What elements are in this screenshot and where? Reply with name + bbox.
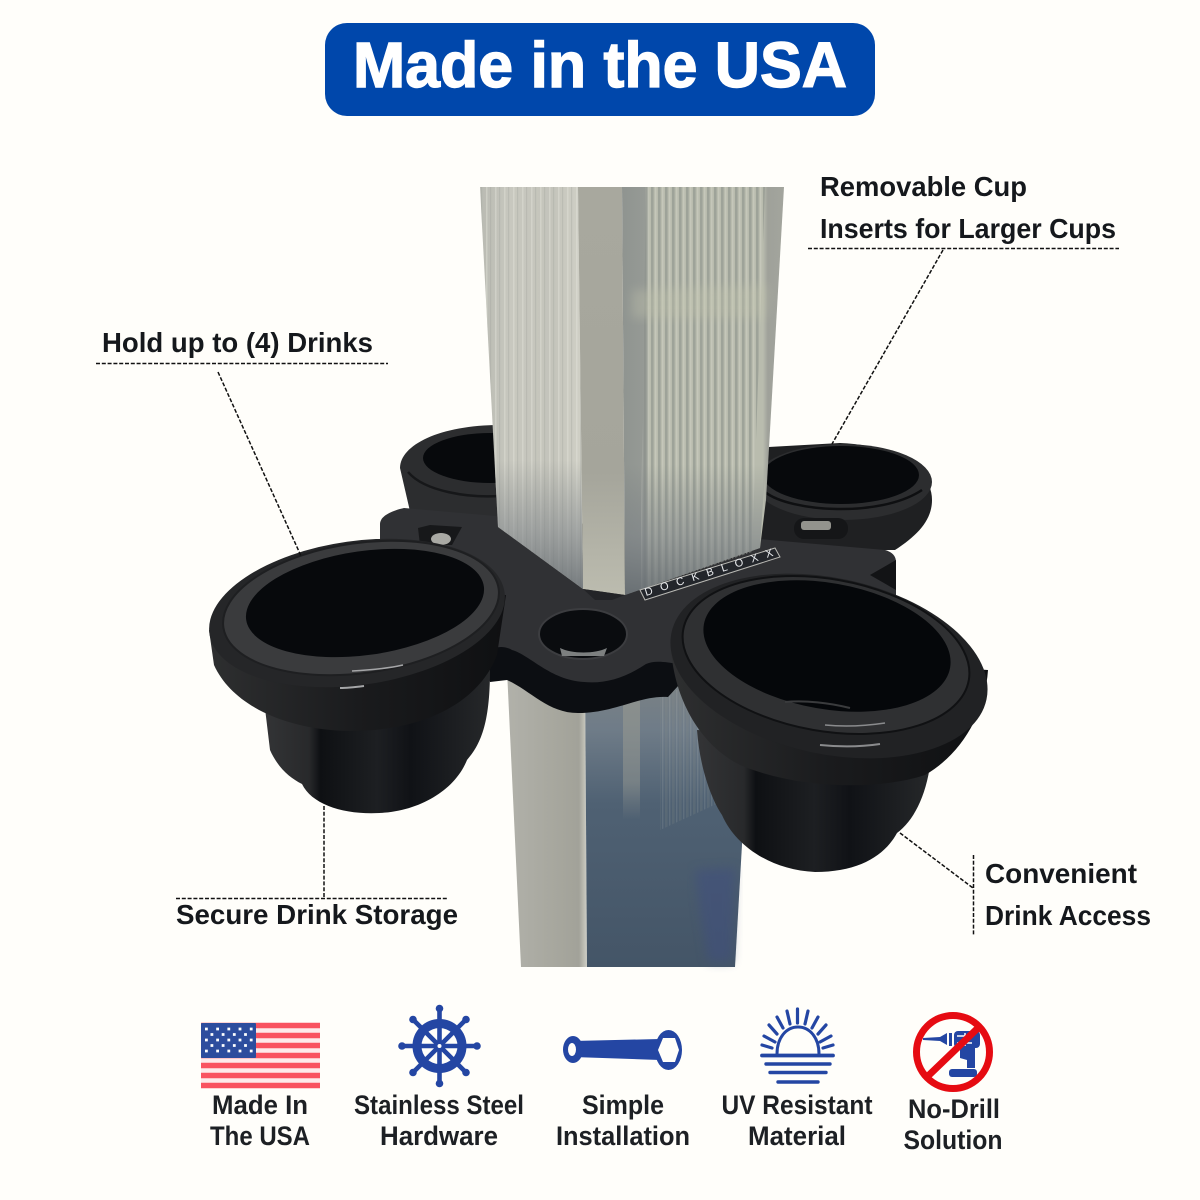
callout: hold up to 4 drinks: [96, 327, 388, 556]
icon: american flag: [201, 1023, 320, 1088]
callout: removable cup inserts: Inserts for Larger Cups: [820, 213, 1116, 244]
icon: sun over water: [762, 1009, 833, 1082]
callout: removable cup inserts: Removable Cup: [820, 171, 1027, 202]
icon: no drill: [916, 1016, 990, 1088]
feature: made in the USA: Made In: [212, 1090, 308, 1120]
callout: convenient drink access: Drink Access: [985, 900, 1151, 931]
feature: stainless steel hardware: Stainless Steel: [354, 1090, 524, 1120]
feature: stainless steel hardware: Hardware: [380, 1121, 498, 1151]
feature: simple installation: [556, 1030, 690, 1151]
callout: removable cup inserts: [808, 171, 1119, 444]
icon: ship wheel: [398, 1005, 481, 1087]
logo badge: DOCKBLOXX: [643, 547, 775, 599]
feature: UV resistant material: UV Resistant: [722, 1090, 872, 1120]
bolt slot left: [418, 525, 462, 545]
bolt slot right: [794, 518, 848, 539]
feature: UV resistant material: Material: [748, 1121, 846, 1151]
feature: no-drill solution: Solution: [904, 1125, 1002, 1155]
feature: no-drill solution: [904, 1016, 1002, 1155]
feature: simple installation: Simple: [582, 1090, 664, 1120]
front right cup: [653, 546, 1005, 872]
lower post: [507, 670, 752, 967]
feature: made in the USA: The USA: [210, 1121, 310, 1151]
feature: stainless steel hardware: [354, 1005, 524, 1151]
feature: simple installation: Installation: [556, 1121, 690, 1151]
bracket plate: [380, 508, 896, 713]
feature: UV resistant material: [722, 1009, 872, 1151]
upper post: [480, 187, 784, 600]
callout: convenient drink access: [900, 833, 1151, 936]
feature: made in the USA: [201, 1023, 320, 1151]
feature: no-drill solution: No-Drill: [908, 1094, 1000, 1124]
callout: hold up to 4 drinks: Hold up to (4) Drinks: [102, 327, 373, 358]
callout: secure drink storage: Secure Drink Storage: [176, 899, 458, 930]
title banner: Made in the USA: [353, 29, 847, 101]
icon: wrench: [563, 1030, 682, 1070]
front left cup: [199, 521, 515, 813]
callout: convenient drink access: Convenient: [985, 858, 1137, 889]
back left cup: [400, 425, 557, 520]
product photo: cup holder on post: [199, 187, 1005, 967]
back right cup: [750, 443, 932, 550]
callout: secure drink storage: [176, 806, 458, 930]
